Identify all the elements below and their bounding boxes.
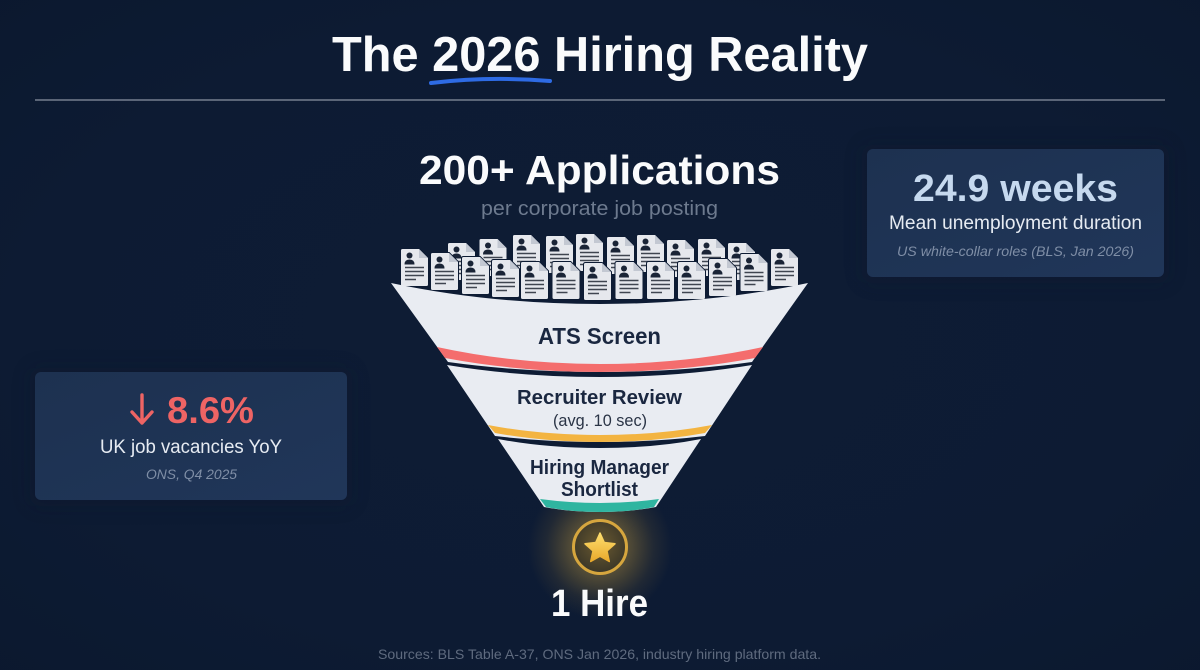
stat value: 8.6%	[167, 390, 254, 431]
star glow	[528, 475, 672, 619]
subheading: per corporate job posting	[481, 198, 718, 220]
funnel stage: recruiter review	[447, 365, 752, 442]
funnel	[391, 234, 808, 512]
amber band	[488, 425, 712, 442]
stage label: Hiring Manager	[530, 457, 669, 479]
panel: UK vacancies stat	[35, 372, 347, 500]
stat label: Mean unemployment duration	[889, 213, 1142, 234]
funnel stage: ATS screen	[391, 283, 808, 372]
stat source: US white-collar roles (BLS, Jan 2026)	[897, 243, 1134, 259]
coral band	[437, 347, 763, 372]
heading: 200+ applications: 200+ Applications	[419, 147, 780, 193]
funnel stage: hiring manager shortlist	[498, 439, 701, 512]
stat source: ONS, Q4 2025	[146, 466, 237, 482]
result label: 1 hire: 1 Hire	[551, 583, 648, 625]
panel: unemployment duration stat	[867, 149, 1164, 277]
sources footer: Sources: BLS Table A-37, ONS Jan 2026, industry hiring platform data.	[378, 646, 821, 662]
stat label: UK job vacancies YoY	[100, 437, 282, 458]
stat value: 24.9 weeks	[913, 168, 1118, 210]
title: The 2026 Hiring Reality	[332, 28, 868, 82]
icon: gold star medal	[574, 520, 626, 574]
stage label: Recruiter Review	[517, 386, 682, 409]
heading: 200+ applications	[419, 147, 780, 220]
title underline accent	[431, 79, 550, 83]
funnel stage: hiring manager shortlist: Shortlist	[561, 479, 638, 501]
icon: down arrow	[132, 395, 152, 423]
teal band	[540, 499, 659, 512]
resume pile	[401, 234, 798, 300]
stage label: ATS Screen	[538, 323, 661, 349]
stage note: (avg. 10 sec)	[553, 411, 647, 430]
